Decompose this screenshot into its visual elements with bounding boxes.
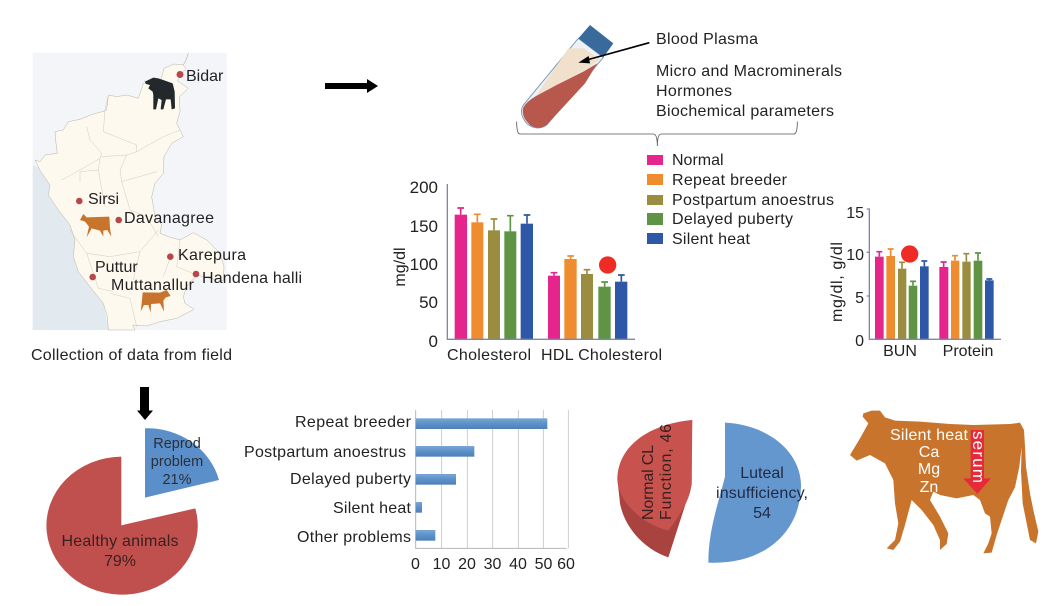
labels: Normal CL <box>640 445 657 520</box>
site labels: Muttanallur <box>111 277 195 294</box>
minerals list: Zn <box>920 479 938 496</box>
BUN tick labels: 0 <box>855 333 864 350</box>
category labels: Cholesterol <box>447 347 531 364</box>
pie: luteal function <box>617 420 808 563</box>
labels: Luteal <box>740 465 784 482</box>
blood labels: Micro and Macrominerals <box>656 63 842 80</box>
labels: 54 <box>753 505 771 522</box>
blood labels: Hormones <box>656 83 732 100</box>
icon: orange cow south <box>141 290 171 313</box>
blood labels: Blood Plasma <box>656 31 758 48</box>
pointer arrow <box>578 43 649 63</box>
legend: Delayed puberty <box>672 211 793 228</box>
site labels: Handena halli <box>202 270 302 287</box>
labels: insufficiency, <box>716 485 808 502</box>
blood labels: Biochemical parameters <box>656 103 834 120</box>
chart: reproductive problems bar chart <box>244 410 575 573</box>
pie: herd reproductive status <box>46 428 219 595</box>
BUN tick labels: 10 <box>846 247 864 264</box>
bars and grid <box>416 410 568 548</box>
chart: cholesterol and HDL <box>392 178 662 364</box>
tube outline <box>521 38 603 128</box>
BUN category labels: BUN <box>883 343 917 360</box>
BUN and protein bars <box>867 209 1001 339</box>
cholesterol tick labels <box>410 178 438 351</box>
category labels: Delayed puberty <box>290 471 411 488</box>
legend: Repeat breeder <box>672 172 788 189</box>
pie labels: 79% <box>104 553 136 570</box>
arrow: down to pie <box>137 387 153 420</box>
BUN tick labels: 15 <box>846 205 864 222</box>
cholesterol tick labels: 200 <box>410 178 438 197</box>
slice: luteal insufficiency <box>708 423 801 563</box>
bracket <box>517 122 797 146</box>
arrow: serum <box>963 430 991 494</box>
pie labels: Healthy animals <box>62 533 178 550</box>
blood <box>523 63 597 128</box>
pie labels: problem <box>151 454 203 470</box>
plasma <box>535 48 600 97</box>
cap <box>578 25 613 57</box>
minerals list: Ca <box>919 444 939 461</box>
arrow: map to blood sample <box>325 79 378 93</box>
cholesterol tick labels: 150 <box>410 217 438 236</box>
BUN tick labels: 5 <box>855 290 864 307</box>
y-axis label: mg/dl <box>392 247 409 287</box>
value axis labels: 10 <box>433 556 450 573</box>
site labels: Davanagree <box>124 210 214 227</box>
BUN y-axis label: mg/dl, g/dl <box>829 242 846 322</box>
panel: blood tube <box>521 25 649 128</box>
pie labels: Reprod <box>153 436 201 452</box>
pie labels <box>62 436 203 570</box>
cow body <box>850 411 1038 553</box>
category labels: Other problems <box>297 529 411 546</box>
site labels: Karepura <box>178 247 246 264</box>
blood labels <box>656 31 842 120</box>
legend: Postpartum anoestrus <box>672 192 834 209</box>
value axis labels: 60 <box>557 556 575 573</box>
category labels: Silent heat <box>333 500 412 517</box>
panel: field map of collection sites <box>33 53 302 330</box>
cholesterol tick labels: 0 <box>429 332 438 351</box>
legend: Silent heat <box>672 231 751 248</box>
minerals list: Silent heat <box>890 427 969 444</box>
map base <box>33 53 227 330</box>
value axis labels: 30 <box>484 556 502 573</box>
value axis labels: 0 <box>411 556 420 573</box>
BUN tick labels <box>846 205 864 350</box>
icon: buffalo <box>144 78 175 109</box>
BUN category labels <box>883 343 993 360</box>
minerals list: Mg <box>918 461 940 478</box>
legend: Normal <box>672 152 724 169</box>
BUN category labels: Protein <box>943 343 993 360</box>
slice: reproductive problem <box>145 428 219 498</box>
pie labels: 21% <box>162 472 192 488</box>
labels: Function, 46 <box>658 424 675 520</box>
category labels: Repeat breeder <box>295 414 412 431</box>
value axis labels <box>411 556 575 573</box>
category labels: HDL Cholesterol <box>541 347 662 364</box>
slice: healthy animals <box>46 457 198 595</box>
cholesterol tick labels: 50 <box>419 293 438 312</box>
category labels <box>447 347 662 364</box>
caption: collection of data: Collection of data from field <box>31 347 232 364</box>
chart: BUN and protein <box>829 205 1001 360</box>
site markers <box>76 71 199 280</box>
text: serum: serum <box>969 431 988 483</box>
cholesterol tick labels: 100 <box>410 255 438 274</box>
panel: cow silhouette with serum minerals <box>850 411 1038 553</box>
value axis labels: 50 <box>535 556 552 573</box>
site labels: Puttur <box>95 259 138 276</box>
category labels: Postpartum anoestrus <box>244 444 406 461</box>
cholesterol bars <box>447 184 635 339</box>
icon: orange cow <box>80 214 111 237</box>
category labels <box>244 414 412 546</box>
minerals list <box>890 427 969 496</box>
site labels: Bidar <box>186 68 224 85</box>
slice: normal CL function <box>617 420 692 557</box>
site labels: Sirsi <box>88 191 119 208</box>
value axis labels: 40 <box>509 556 527 573</box>
legend <box>647 152 834 248</box>
labels <box>640 424 808 522</box>
value axis labels: 20 <box>458 556 476 573</box>
site labels <box>88 68 302 294</box>
